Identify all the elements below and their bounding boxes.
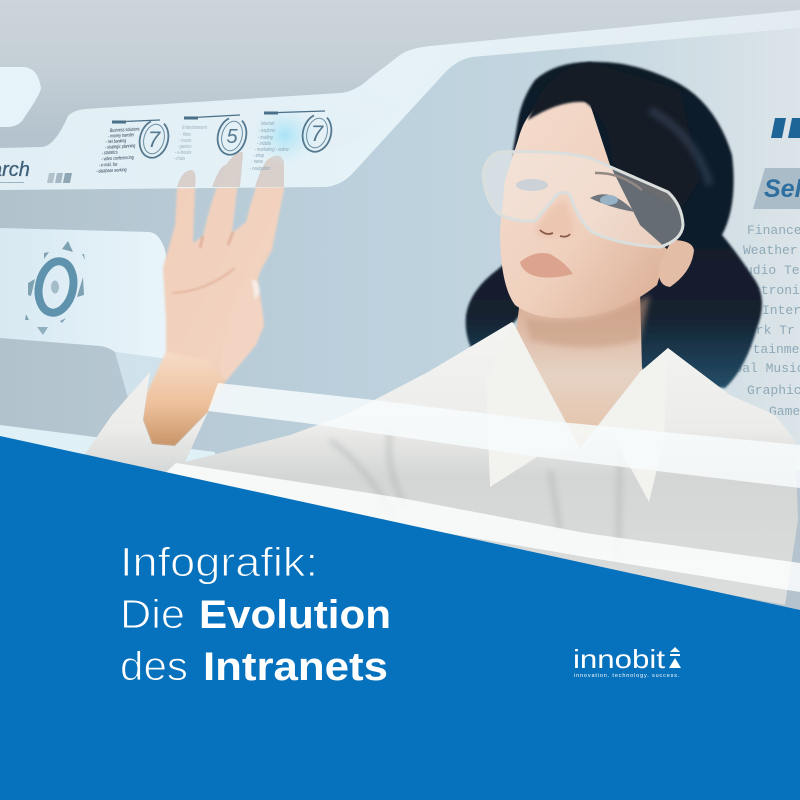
title: Infografik: [120,539,318,585]
widget: internet: - mailing [258,135,273,140]
shirt folds [330,430,620,560]
widget: entertainment: - games [177,144,192,149]
logo: innobit [573,644,681,679]
panel: right list: ork Tr [748,323,795,338]
widget: internet: internet [261,121,275,126]
widget: internet: - mobile [257,141,272,146]
title [120,539,391,689]
widget: entertainment: - music [179,138,192,143]
woman [85,62,798,605]
logo: innobit: innobit [573,644,666,674]
widget: internet: 7 [311,121,324,146]
panel: right list: Game [769,404,800,419]
fingertips seen through the band [177,152,284,187]
collar [486,322,668,502]
widget: entertainment: - films [180,132,192,137]
fingertip glow [253,105,317,165]
title: Intranets [203,645,388,689]
eyes [516,179,635,212]
panel: right list: ertainme [737,342,799,357]
title: Die [120,591,185,637]
ear [659,240,694,287]
search label [0,159,72,183]
widget: business solutions: - money transfer [108,132,135,139]
panel: lower left navigation [0,228,175,360]
blue diagonal panel [0,436,800,800]
panel: right list: Inter [762,303,800,318]
light floor band [0,425,215,468]
lips [520,253,573,278]
hair back [466,62,762,388]
widget: business solutions: - strategic planning [105,143,136,150]
light stripe below navigation panel [115,352,175,405]
widget: internet: - marketing - online [255,147,289,152]
widget: business solutions: - e-mail, fax [99,161,118,168]
hand with forearm [143,152,284,446]
widget: business solutions: 7 [148,127,161,152]
widget: internet: - explorer [259,128,276,133]
widget: internet: - shop [253,153,265,158]
goggles [483,152,683,247]
panel: right list: Finance [747,223,800,238]
widget: business solutions: - net banking [105,138,127,144]
logo: innobit: innovation. technology. success. [574,673,680,679]
panel: right list: Graphic [747,383,800,398]
panel: right screen [0,28,800,470]
title: des [120,643,188,689]
panel: right list: Weather [743,243,798,258]
panel: right list [711,118,800,419]
eyebrow [595,173,642,190]
widget: business solutions: - video conferencing [101,154,134,162]
chin shadow [525,295,650,348]
nose [535,200,575,238]
widget: internet: - navigation [250,166,271,171]
widget: entertainment: 5 [226,126,238,148]
title: Evolution [199,593,391,637]
widget: business solutions: Business solutions [110,126,140,133]
widget: internet [250,111,335,171]
face [500,97,668,318]
widget: entertainment: - chats [173,156,186,161]
hair fringe [528,62,700,210]
widget: entertainment: - e-books [175,150,192,155]
neck [515,290,642,448]
widget: business solutions: - statistics [102,149,118,156]
light band across shirt [160,383,800,592]
widget: entertainment [173,114,250,161]
widget: entertainment: Entertainment [182,125,207,130]
widget: business solutions: - database working [96,167,127,174]
shirt [85,322,798,605]
widget: business solutions [94,117,172,174]
hair highlight [650,110,710,185]
panel: top left tab [0,67,41,127]
panel: main menu band [0,10,800,190]
icon: navigation dial [25,241,85,335]
widget: internet: - news [251,159,264,164]
